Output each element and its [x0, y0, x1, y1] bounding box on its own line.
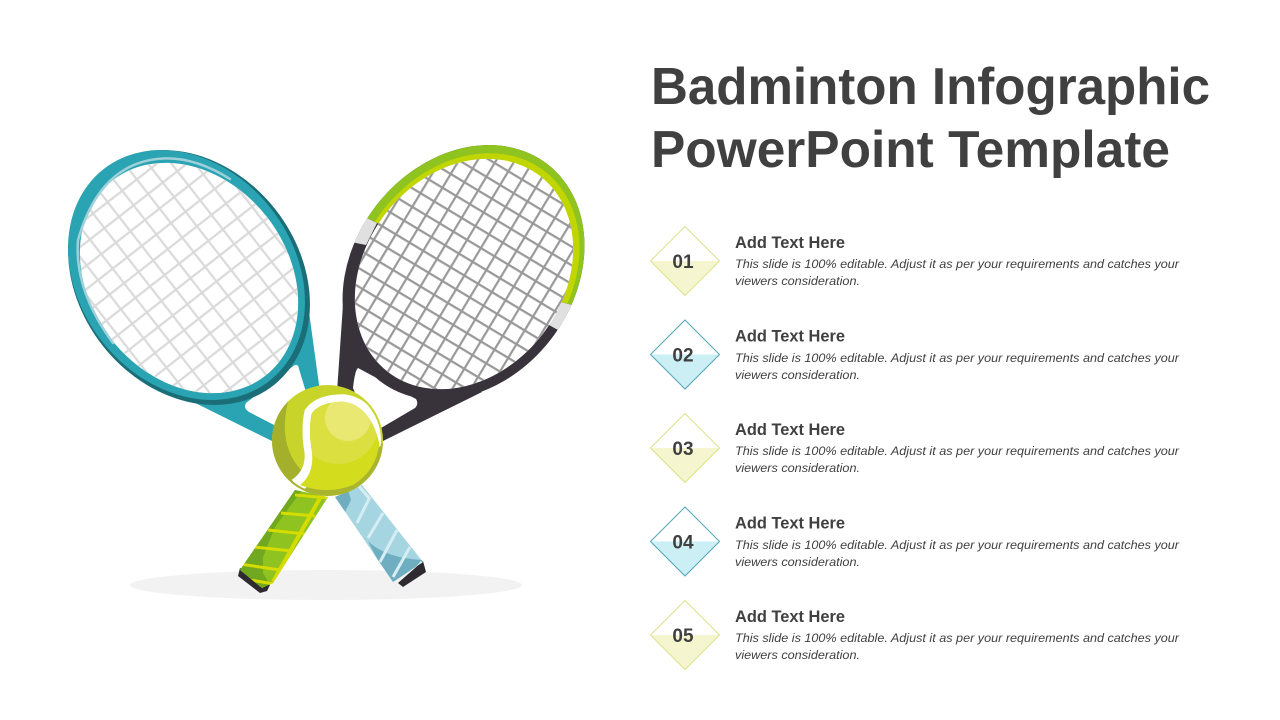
teal racket frame: [19, 103, 354, 447]
text 05: This slide is 100% editable. Adjust it as per your requirements and catches your: [735, 631, 1180, 645]
text 04: This slide is 100% editable. Adjust it as per your requirements and catches your: [735, 538, 1180, 552]
dark racket frame: [292, 97, 635, 448]
ball seam: [296, 402, 384, 486]
title: PowerPoint Template: [651, 121, 1170, 179]
blue grip end cap: [398, 561, 426, 587]
diamond 01: [650, 226, 720, 296]
grey band right: [549, 302, 572, 330]
ground shadow: [130, 570, 522, 600]
diamond 03: [650, 414, 720, 482]
diamond 05: 05: [672, 626, 694, 647]
icon: teal racket: [18, 102, 360, 453]
text 04: Add Text Here: [735, 514, 845, 532]
blue grip shade: [335, 492, 423, 582]
text 02: [735, 328, 1180, 382]
blue grip body: [335, 485, 423, 582]
teal racket neck: [155, 290, 320, 441]
text 01: [735, 234, 1180, 288]
text 03: viewers consideration.: [735, 461, 860, 475]
diamond 01: 01: [672, 252, 694, 273]
teal racket frame shadow: [18, 102, 360, 453]
title: Badminton Infographic: [651, 58, 1210, 116]
text 05: [735, 608, 1180, 662]
grey band left: [354, 218, 377, 245]
icon: green grip: [235, 485, 330, 593]
text 03: Add Text Here: [735, 421, 845, 439]
list item 04: [650, 507, 1180, 576]
text 01: viewers consideration.: [735, 274, 860, 288]
green grip wraps: [238, 495, 330, 584]
diamond 02: 02: [672, 346, 694, 366]
green grip end cap: [238, 568, 270, 593]
dark racket neck: [337, 290, 482, 450]
diamond 02: [650, 320, 720, 389]
icon: tennis ball: [272, 385, 383, 496]
text 04: viewers consideration.: [735, 555, 860, 569]
teal racket string bed: [35, 119, 343, 437]
list item 05: [650, 600, 1180, 670]
diamond 04: [650, 507, 720, 576]
diamond 04: 04: [672, 532, 694, 554]
blue grip wraps: [357, 484, 422, 582]
green grip wrapped detail: [240, 490, 328, 588]
text 01: Add Text Here: [735, 234, 845, 252]
text 02: viewers consideration.: [735, 368, 860, 382]
teal racket highlight: [78, 158, 230, 343]
text 01: This slide is 100% editable. Adjust it as per your requirements and catches your: [735, 257, 1180, 271]
ball lobe: [300, 402, 380, 490]
diamond 05: [650, 600, 720, 670]
list item 03: [650, 414, 1180, 482]
text 03: [735, 421, 1180, 475]
icon: green and dark racket: [337, 145, 584, 442]
dark racket string bed: [310, 115, 618, 433]
text 04: [735, 514, 1180, 569]
ball base: [272, 385, 383, 496]
text 02: Add Text Here: [735, 328, 845, 346]
teal racket neck opening: [245, 365, 306, 426]
list item 01: [650, 226, 1180, 296]
text 05: Add Text Here: [735, 608, 845, 626]
diamond 03: 03: [672, 439, 694, 460]
list item 02: [650, 320, 1180, 389]
text 03: This slide is 100% editable. Adjust it as per your requirements and catches your: [735, 444, 1180, 458]
title: [651, 58, 1210, 179]
text 05: viewers consideration.: [735, 648, 860, 662]
blue grip wrapped detail: [335, 486, 423, 582]
green frame section: [367, 145, 584, 305]
green grip shade: [240, 490, 302, 588]
ball shading: [272, 401, 383, 496]
dark racket neck opening: [353, 368, 417, 434]
icon: blue grip: [330, 484, 426, 590]
green grip body: [240, 490, 328, 588]
text 02: This slide is 100% editable. Adjust it as per your requirements and catches your: [735, 351, 1180, 365]
